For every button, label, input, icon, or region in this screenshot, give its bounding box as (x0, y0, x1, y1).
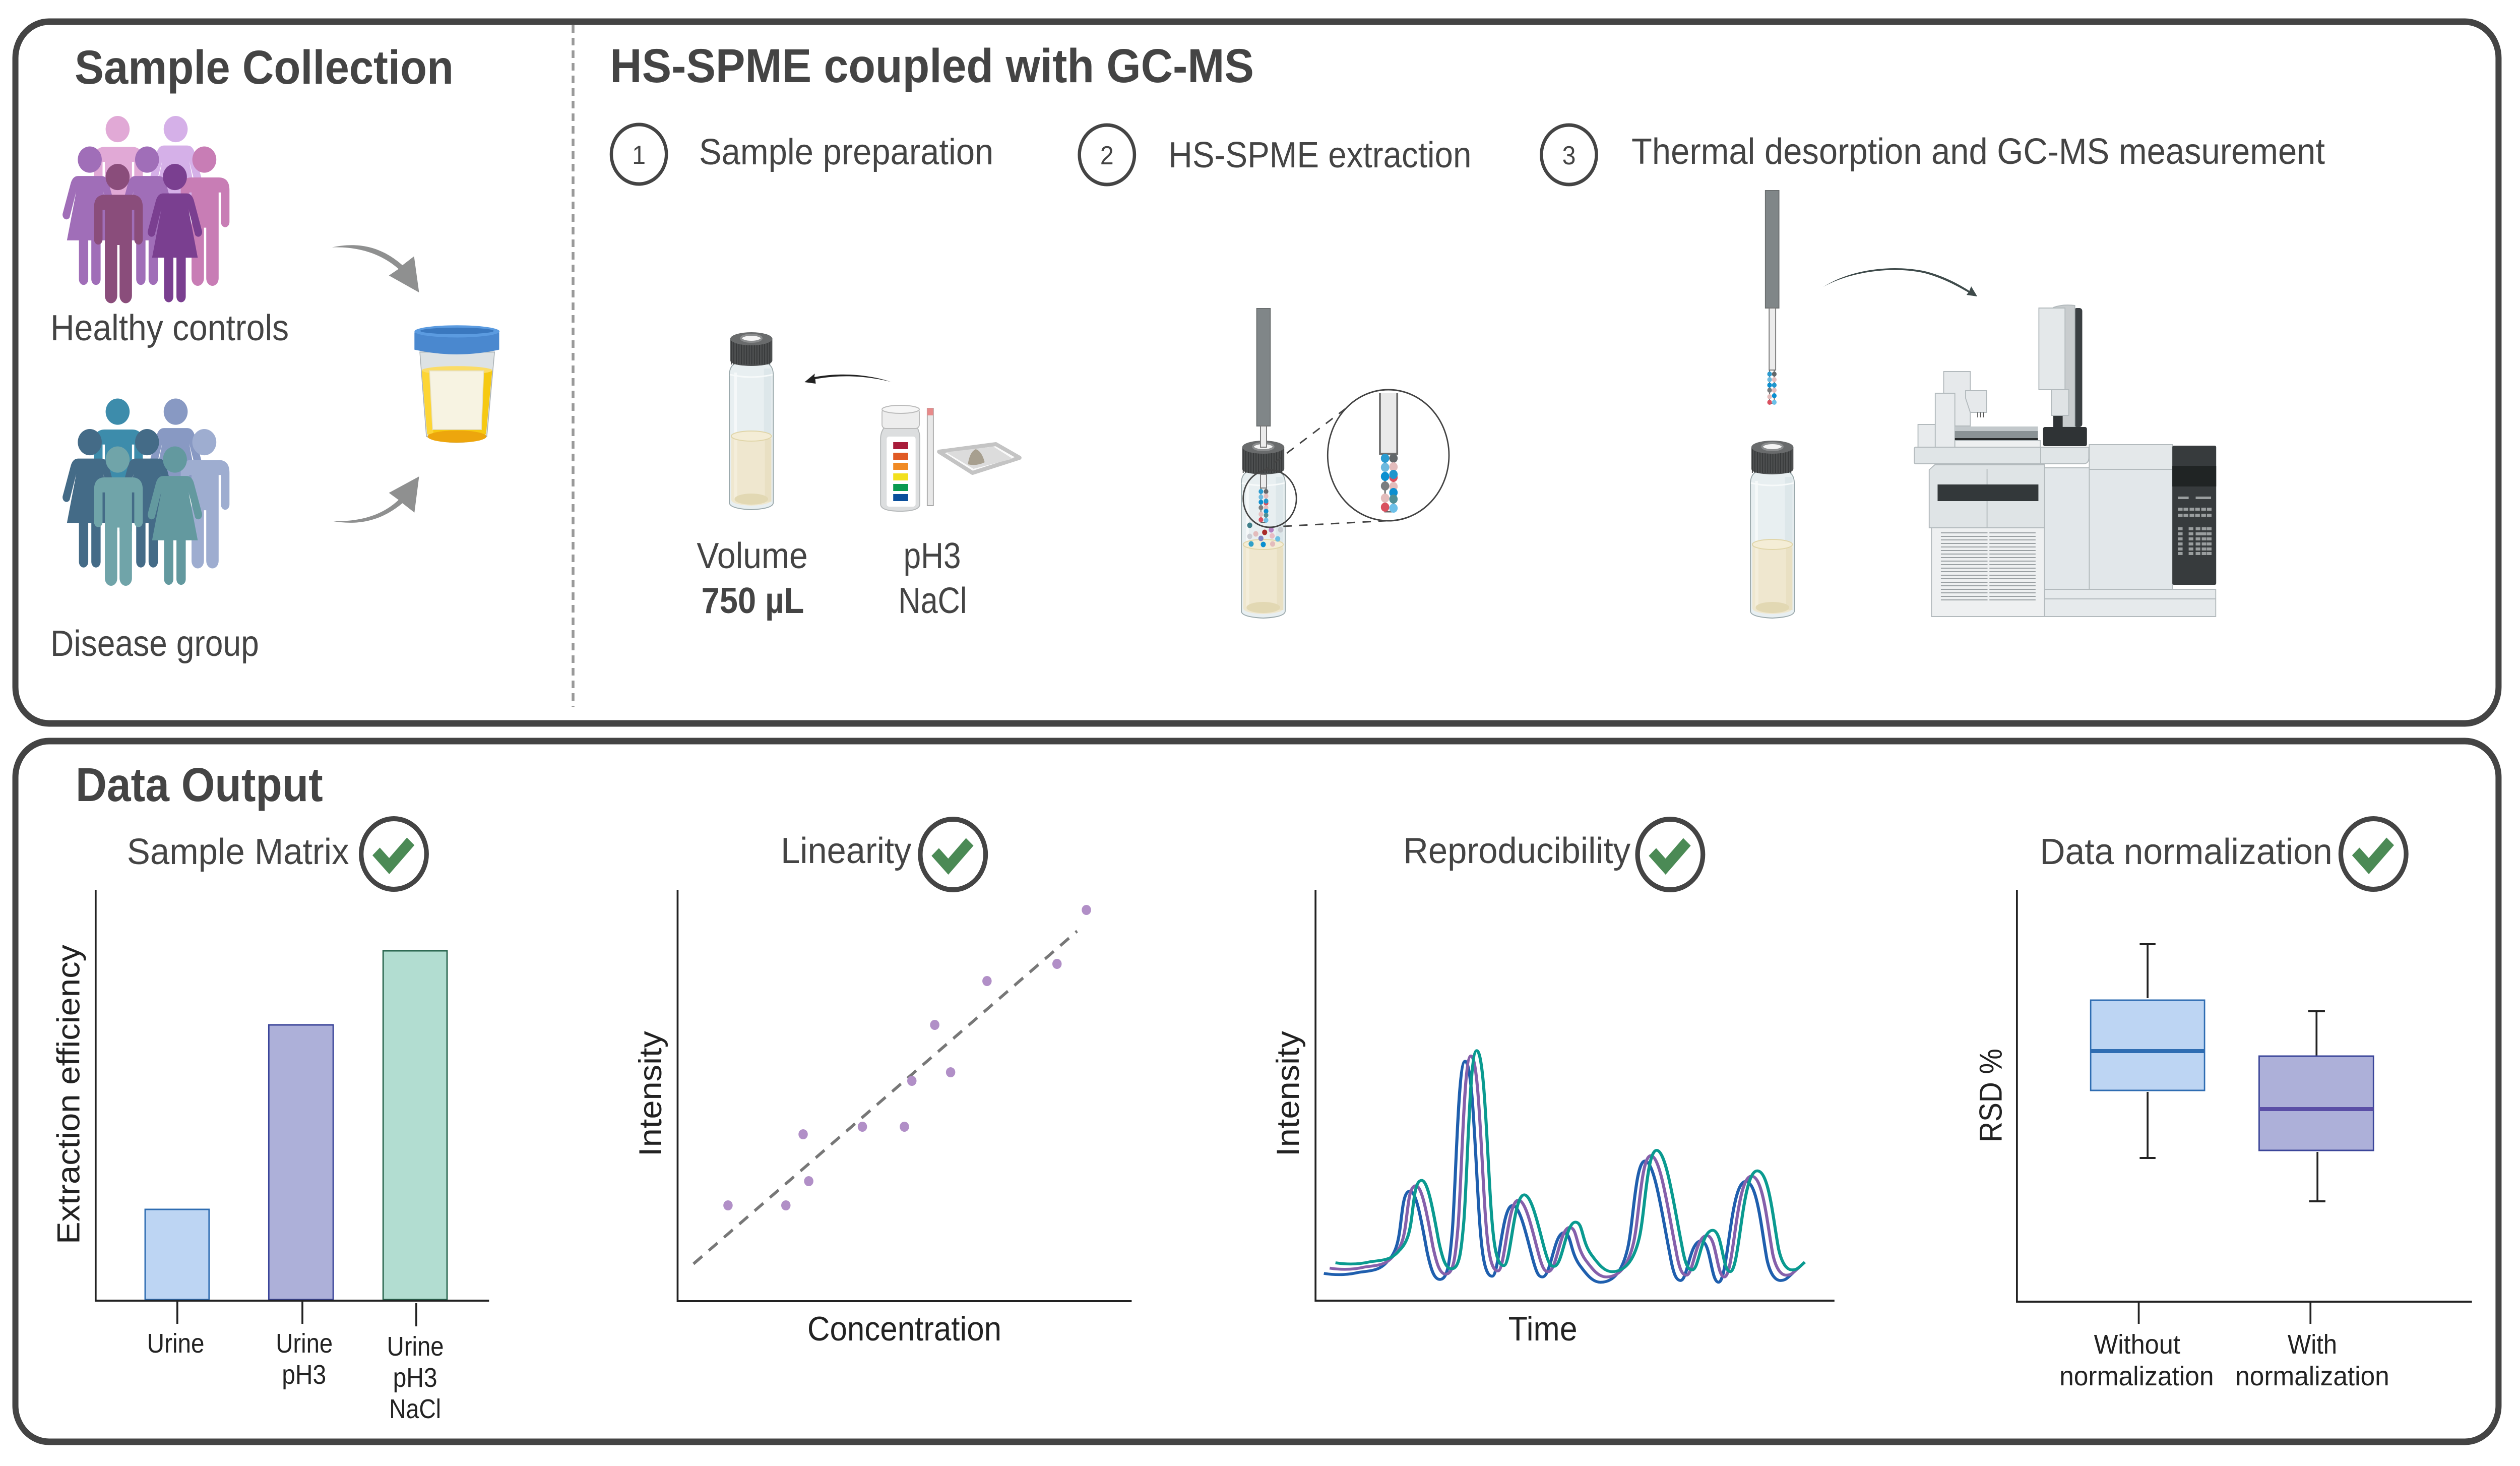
x label: Urine pH3: Urine (276, 1328, 333, 1359)
icon: vial with urine (729, 332, 773, 510)
label: HS-SPME extraction: HS-SPME extraction (1169, 135, 1471, 175)
step number 1 (611, 125, 666, 184)
icon: vial after extraction (1750, 441, 1794, 618)
label: Disease group: Disease group (50, 623, 259, 664)
icon: weighing dish with NaCl (939, 444, 1020, 473)
label: Thermal desorption and GC-MS measurement: Thermal desorption and GC-MS measurement (1631, 131, 2325, 172)
section: sample collection (50, 41, 499, 664)
arrow: healthy controls to cup (332, 245, 419, 292)
icon: GC-MS instrument (1914, 305, 2216, 617)
label: pH3 NaCl: NaCl (898, 580, 967, 621)
title: Reproducibility: Reproducibility (1403, 830, 1630, 871)
x label: With normalization: normalization (2235, 1361, 2389, 1391)
icon: headspace vial (1241, 441, 1285, 618)
x axis label: Time: Time (1508, 1310, 1578, 1348)
arrow: disease group to cup (332, 476, 419, 523)
icon: headspace volatile molecules (1247, 522, 1283, 547)
step number 1: 1 (632, 140, 646, 169)
icon: urine sample cup (414, 325, 499, 443)
callout: magnified fiber detail (1328, 390, 1449, 521)
icon: check badge (2341, 819, 2406, 889)
arrow: fiber to GC-MS (1823, 268, 1977, 296)
x label: Urine pH3 NaCl: NaCl (389, 1394, 441, 1424)
title: Sample Matrix: Sample Matrix (127, 831, 349, 872)
step number 3: 3 (1562, 141, 1576, 170)
icon: pH test strip (927, 408, 933, 506)
title: Linearity: Linearity (781, 830, 912, 871)
box plot (2017, 890, 2472, 1324)
label: Healthy controls: Healthy controls (50, 308, 289, 348)
y axis label: RSD %: RSD % (1973, 1049, 2008, 1142)
y axis label: Extraction efficiency: Extraction efficiency (51, 945, 86, 1244)
label: Volume 750 µL: Volume (697, 535, 808, 576)
bar chart (96, 890, 489, 1326)
label: Sample preparation: Sample preparation (699, 132, 993, 172)
y axis label: Intensity: Intensity (633, 1031, 668, 1156)
x label: With normalization (2235, 1329, 2389, 1391)
label: Volume 750 µL (697, 535, 808, 621)
x label: Without normalization: Without (2094, 1329, 2180, 1360)
x label: Without normalization: normalization (2059, 1361, 2214, 1391)
step 1: sample preparation (611, 125, 1020, 621)
label: pH3 NaCl: pH3 (904, 535, 961, 576)
panel: data output (16, 741, 2498, 1442)
panel: top workflow (16, 22, 2498, 723)
callout: zoom connector lines (1261, 407, 1386, 526)
icon: disease group crowd (62, 399, 229, 586)
label: Volume 750 µL: 750 µL (702, 580, 804, 621)
step number 2 (1080, 125, 1135, 185)
chart group: sample matrix (51, 819, 489, 1424)
icon: check badge (1637, 819, 1703, 890)
x label: Without normalization (2059, 1329, 2214, 1391)
heading: Sample Collection: Sample Collection (75, 41, 454, 94)
step 3: thermal desorption and GC-MS (1541, 125, 2325, 618)
x axis label: Concentration: Concentration (807, 1310, 1001, 1348)
x label: Urine pH3 NaCl (387, 1331, 444, 1424)
scatter chart (677, 890, 1131, 1301)
arrow: reagents to vial (804, 374, 892, 384)
label: pH3 NaCl (898, 535, 967, 621)
chromatogram chart (1315, 890, 1835, 1301)
x label: Urine pH3 NaCl: Urine (387, 1331, 444, 1362)
icon: healthy controls crowd (62, 116, 229, 303)
x label: Urine pH3 (276, 1328, 333, 1390)
step number 3 (1541, 125, 1597, 185)
x label: Urine: Urine (147, 1328, 205, 1359)
x label: Urine pH3 NaCl: pH3 (393, 1363, 437, 1393)
x label: Urine pH3: pH3 (282, 1360, 326, 1390)
y axis label: Intensity: Intensity (1270, 1031, 1305, 1156)
callout: magnifier circle on fiber (1243, 470, 1296, 527)
icon: SPME fiber withdrawn (1766, 191, 1779, 405)
x label: With normalization: With (2288, 1329, 2337, 1360)
icon: pH strip bottle (880, 405, 920, 511)
chart group: reproducibility (1270, 819, 1835, 1348)
icon: SPME fiber in vial (1257, 309, 1270, 523)
heading: Data Output: Data Output (76, 758, 323, 812)
chart group: data normalization (1973, 819, 2472, 1391)
title: Data normalization: Data normalization (2040, 831, 2333, 872)
icon: check badge (920, 819, 986, 890)
step 2: HS-SPME extraction (1080, 125, 1471, 618)
section: HS-SPME coupled with GC-MS (610, 39, 2325, 621)
heading: HS-SPME coupled with GC-MS: HS-SPME coupled with GC-MS (610, 39, 1254, 93)
chart group: linearity (633, 819, 1131, 1348)
icon: check badge (361, 819, 426, 889)
step number 2: 2 (1100, 141, 1114, 170)
